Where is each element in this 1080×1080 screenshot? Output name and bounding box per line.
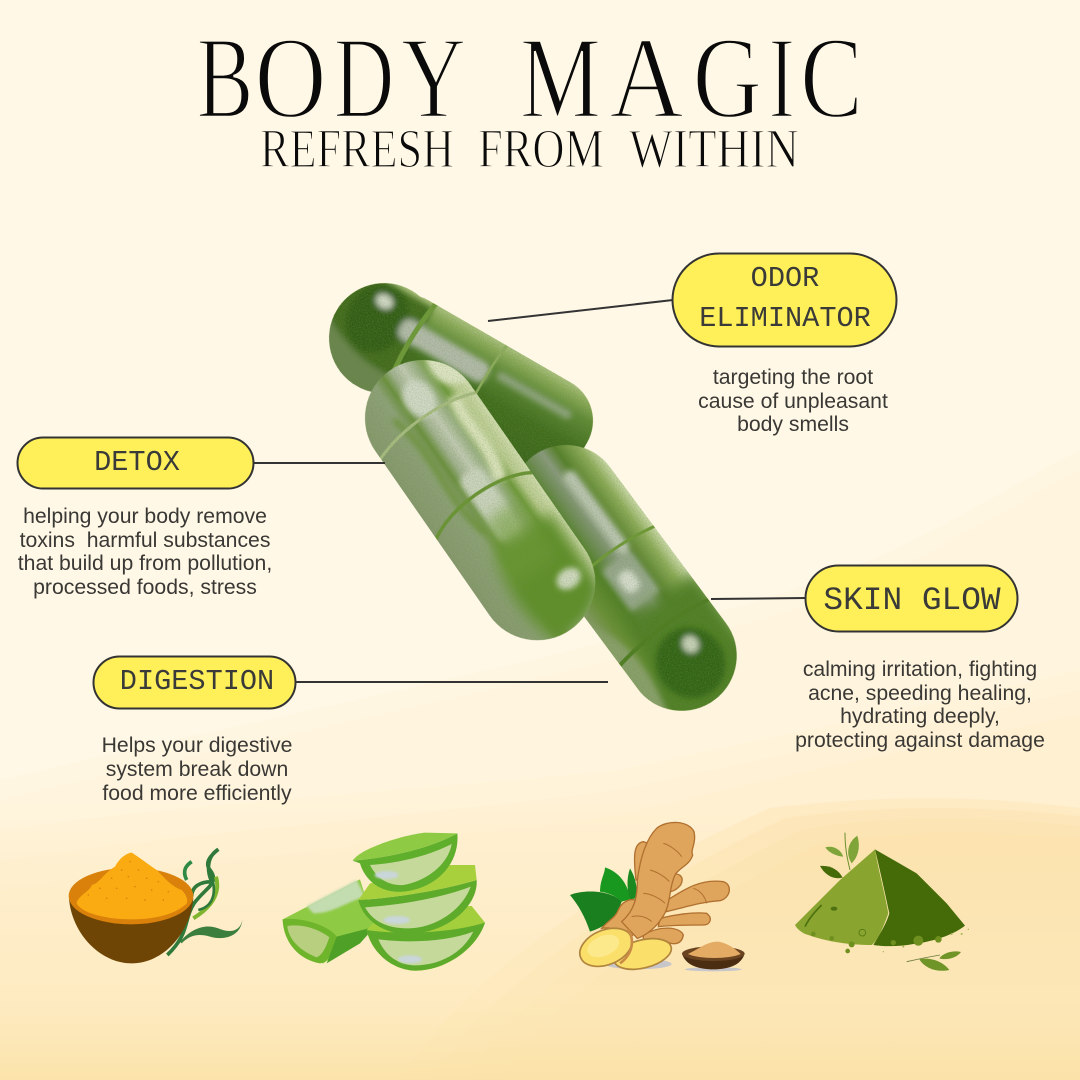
badge: odor eliminator: ODOR bbox=[751, 262, 819, 295]
text: digestion: Helps your digestive bbox=[102, 734, 292, 757]
text: skin glow: protecting against damage bbox=[795, 729, 1045, 752]
text: digestion: system break down bbox=[106, 758, 288, 781]
text: detox: processed foods, stress bbox=[33, 576, 257, 599]
capsule: back top bbox=[328, 282, 594, 464]
title: O bbox=[255, 14, 326, 143]
capsule: front centre bbox=[364, 360, 596, 640]
badge: odor eliminator bbox=[672, 254, 896, 346]
icon: aloe vera bbox=[283, 833, 485, 971]
title: I bbox=[768, 13, 795, 143]
title bbox=[197, 12, 863, 143]
badge: digestion: DIGESTION bbox=[120, 665, 274, 698]
icon: matcha powder bbox=[795, 833, 969, 971]
capsule: right lower bbox=[525, 445, 737, 711]
text: odor eliminator bbox=[698, 366, 888, 436]
text: skin glow: calming irritation, fighting bbox=[803, 658, 1037, 681]
text: odor eliminator: cause of unpleasant bbox=[698, 390, 888, 413]
text: skin glow: acne, speeding healing, bbox=[808, 682, 1032, 705]
text: odor eliminator: targeting the root bbox=[713, 366, 873, 389]
subtitle: WITHIN bbox=[629, 118, 799, 179]
text: digestion bbox=[102, 734, 292, 805]
title: D bbox=[334, 12, 394, 142]
title: A bbox=[609, 13, 684, 142]
text: detox: helping your body remove bbox=[23, 505, 267, 528]
connector: skin glow bbox=[711, 598, 806, 599]
title: C bbox=[800, 13, 863, 142]
badge: digestion bbox=[94, 656, 296, 708]
capsules image bbox=[297, 253, 770, 752]
connector: detox bbox=[254, 462, 385, 464]
connector: odor eliminator bbox=[488, 300, 673, 321]
text: detox: toxins harmful substances bbox=[20, 529, 270, 552]
text: detox: that build up from pollution, bbox=[18, 552, 272, 575]
title: G bbox=[693, 14, 762, 143]
title: M bbox=[520, 13, 601, 143]
icon: ginger root bbox=[570, 822, 745, 975]
text: skin glow: hydrating deeply, bbox=[840, 705, 1000, 728]
title: B bbox=[197, 14, 253, 143]
badge: skin glow bbox=[806, 566, 1018, 632]
text: digestion: food more efficiently bbox=[102, 782, 292, 805]
title: Y bbox=[401, 13, 466, 143]
subtitle: FROM bbox=[478, 118, 604, 179]
badge: odor eliminator: ELIMINATOR bbox=[699, 302, 871, 335]
subtitle: REFRESH bbox=[260, 118, 454, 179]
badge: detox: DETOX bbox=[94, 446, 180, 479]
text: odor eliminator: body smells bbox=[737, 413, 849, 436]
text: detox bbox=[18, 505, 272, 599]
subtitle bbox=[260, 118, 799, 179]
icon: turmeric bowl bbox=[69, 849, 242, 963]
badge: skin glow: SKIN GLOW bbox=[823, 582, 1001, 619]
badge: detox bbox=[18, 438, 254, 488]
connector: digestion bbox=[296, 681, 608, 683]
text: skin glow bbox=[795, 658, 1045, 752]
